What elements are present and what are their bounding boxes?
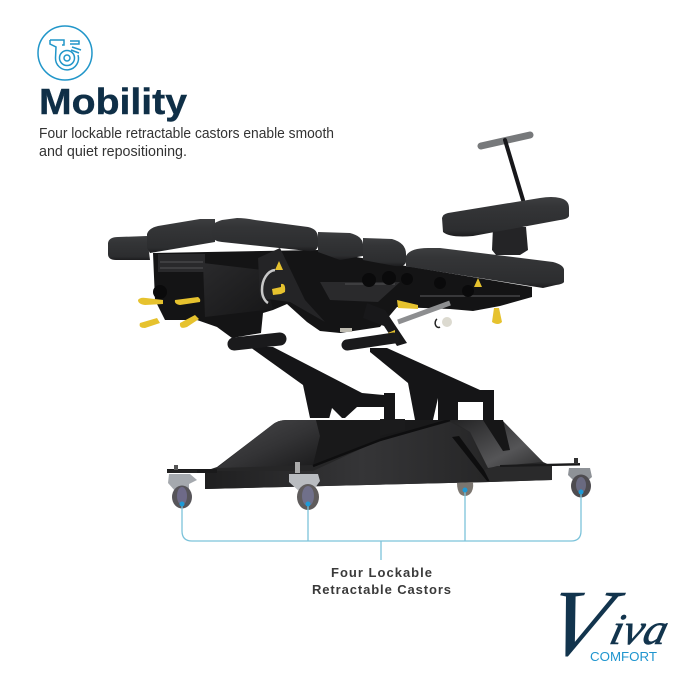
icon: castor wheel [38, 26, 92, 80]
castor 4 [568, 458, 592, 498]
lift arms [250, 347, 494, 420]
castor 1 [167, 465, 197, 508]
tilt mechanism [153, 248, 532, 346]
body pads [108, 218, 564, 288]
description text: Four lockable retractable castors enable smooth [39, 126, 334, 142]
yellow levers [138, 261, 502, 338]
headrest pad [442, 197, 569, 236]
logo: V [535, 571, 622, 676]
heading: Mobility [39, 81, 187, 122]
description text [39, 126, 334, 160]
callout label [312, 565, 451, 597]
description text: and quiet repositioning. [39, 144, 187, 160]
castor 3 [457, 482, 473, 496]
support bracket [492, 227, 528, 255]
chiropractic table [108, 135, 592, 510]
headrest handle [481, 135, 530, 200]
cross bars [234, 338, 394, 345]
callout label: Retractable Castors [312, 582, 451, 597]
callout label: Four Lockable [331, 565, 432, 580]
logo: COMFORT [590, 650, 657, 664]
castor 2 [289, 462, 320, 510]
base [167, 419, 580, 489]
logo: iva [605, 605, 674, 654]
logo [535, 571, 682, 676]
callout connector lines [182, 491, 581, 560]
castor marker dots [180, 488, 584, 506]
